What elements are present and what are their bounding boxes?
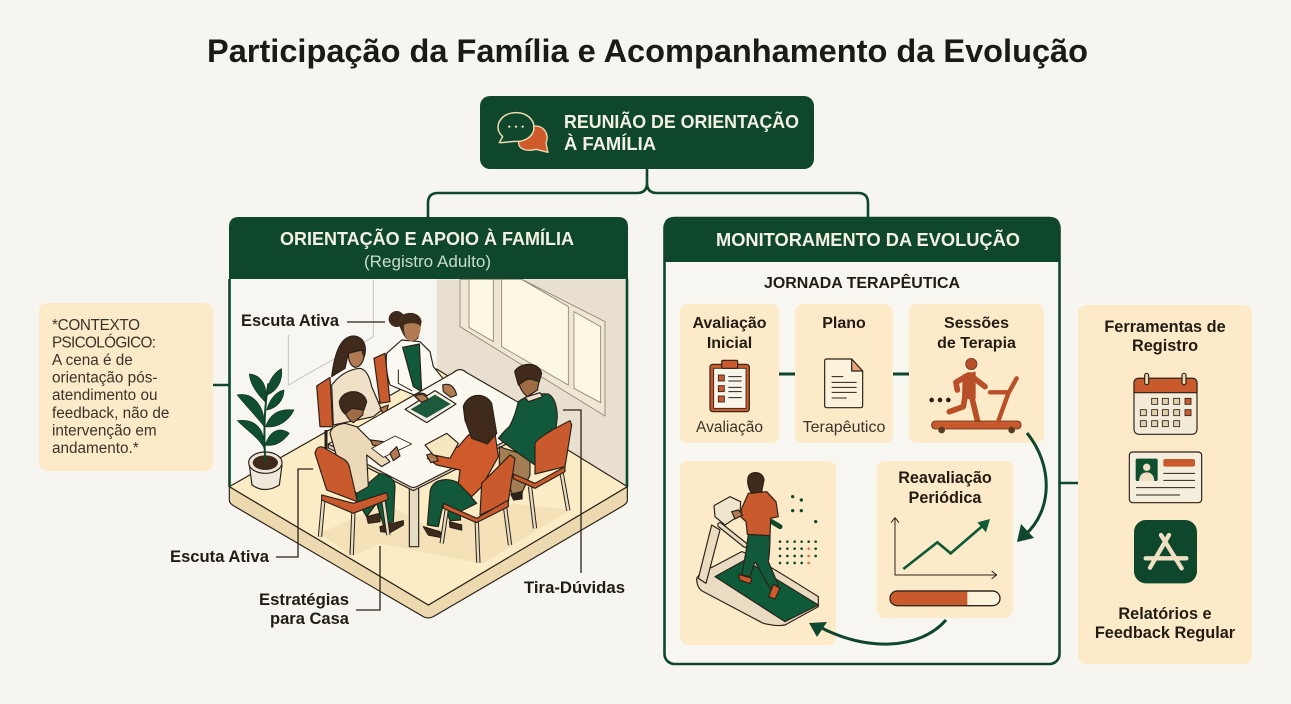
text: psychological context: feedback, não de — [52, 405, 169, 422]
scene: isometric family meeting room — [229, 279, 627, 618]
right wall — [437, 279, 627, 487]
illustration: man on treadmill — [697, 473, 818, 626]
label: active listening bottom: Escuta Ativa — [170, 548, 270, 566]
doctor's hands — [413, 384, 457, 403]
notebook — [425, 433, 458, 458]
icon: treadmill runner — [929, 358, 1021, 433]
panel: progress monitoring — [664, 217, 1060, 664]
person: man in beige — [330, 392, 403, 533]
label: question answering: Tira-Dúvidas — [524, 579, 625, 597]
chair: front right — [442, 455, 515, 563]
text: psychological context: *CONTEXTO — [52, 317, 140, 334]
window — [460, 279, 605, 416]
icon: calendar — [1134, 373, 1197, 434]
panel: record tools — [1078, 305, 1252, 664]
heading: record tools: Registro — [1132, 337, 1198, 355]
card: periodic reassessment: Periódica — [909, 489, 982, 507]
left wall — [229, 279, 437, 487]
heading: reports and feedback: Relatórios e — [1118, 605, 1212, 623]
label: active listening top: Escuta Ativa — [241, 312, 340, 330]
panel frame — [230, 279, 627, 487]
icon: clipboard — [710, 360, 749, 412]
text: psychological context: orientação pós- — [52, 370, 157, 386]
card: therapeutic plan: Terapêutico — [803, 419, 885, 436]
heading: record tools: Ferramentas de — [1104, 318, 1226, 336]
chart: rising trend and progress bar — [890, 518, 1000, 606]
card: therapy sessions: de Terapia — [937, 335, 1016, 352]
label: home strategies: para Casa — [270, 610, 350, 628]
chair: doctor — [374, 353, 390, 403]
chair: front left — [315, 447, 388, 555]
panel header — [664, 217, 1060, 262]
chair: right — [513, 421, 572, 528]
icon: chat bubbles — [498, 113, 548, 152]
person: seated woman — [332, 336, 388, 425]
arrow: reassessment to treadmill — [809, 620, 946, 644]
card: initial assessment: Avaliação — [692, 315, 767, 332]
panel: context note — [39, 303, 213, 471]
card: therapy sessions — [909, 304, 1044, 443]
card: therapy sessions: Sessões — [944, 315, 1009, 332]
person: man in green sweater — [498, 364, 557, 501]
card: therapeutic plan — [795, 304, 893, 443]
label: home strategies: Estratégias — [259, 591, 349, 609]
heading: meeting: À FAMÍLIA — [564, 133, 656, 154]
text: psychological context: A cena é de — [52, 352, 133, 369]
heading: reports and feedback: Feedback Regular — [1095, 624, 1236, 642]
card: initial assessment: Inicial — [707, 335, 752, 352]
top box: family orientation meeting — [480, 96, 814, 169]
heading: therapeutic journey: JORNADA TERAPÊUTICA — [764, 273, 960, 292]
table — [328, 370, 548, 547]
label: home strategies — [259, 546, 380, 628]
card: treadmill illustration — [680, 461, 836, 645]
tablet on table — [405, 391, 456, 423]
text: psychological context: intervenção em — [52, 422, 157, 440]
arrow: sessions to reassessment — [1017, 433, 1046, 542]
text: psychological context: andamento.* — [52, 440, 139, 457]
card: therapeutic plan: Plano — [822, 315, 866, 332]
icon: document — [825, 359, 863, 408]
card: periodic reassessment — [877, 461, 1013, 618]
card: initial assessment: Avaliação — [696, 419, 763, 436]
icon: app — [1134, 520, 1197, 583]
subheading: adult record: (Registro Adulto) — [364, 253, 491, 271]
card: initial assessment — [680, 304, 779, 443]
heading: orientation and support: ORIENTAÇÃO E APOIO À FAMÍLIA — [280, 228, 574, 249]
floor shadows — [320, 503, 570, 563]
label: active listening bottom — [170, 469, 313, 566]
panel: family orientation and support — [170, 217, 628, 628]
connector: top box to panels — [428, 168, 868, 218]
heading: monitoring: MONITORAMENTO DA EVOLUÇÃO — [716, 229, 1020, 250]
label: question answering — [524, 410, 625, 597]
icon: potted plant — [237, 369, 294, 489]
title: Participação da Família e Acompanhamento da Evolução — [207, 33, 1088, 69]
person: doctor — [386, 311, 448, 396]
card: periodic reassessment: Reavaliação — [898, 469, 992, 487]
text: psychological context: atendimento ou — [52, 387, 157, 404]
paper on table — [372, 436, 412, 457]
floor slab — [229, 487, 627, 618]
panel header — [229, 217, 628, 279]
heading: meeting: REUNIÃO DE ORIENTAÇÃO — [564, 111, 799, 132]
icon: patient record card — [1129, 452, 1202, 503]
text: psychological context: PSICOLÓGICO: — [52, 334, 156, 352]
person: woman in orange — [423, 395, 498, 538]
chair: back left — [317, 377, 333, 450]
